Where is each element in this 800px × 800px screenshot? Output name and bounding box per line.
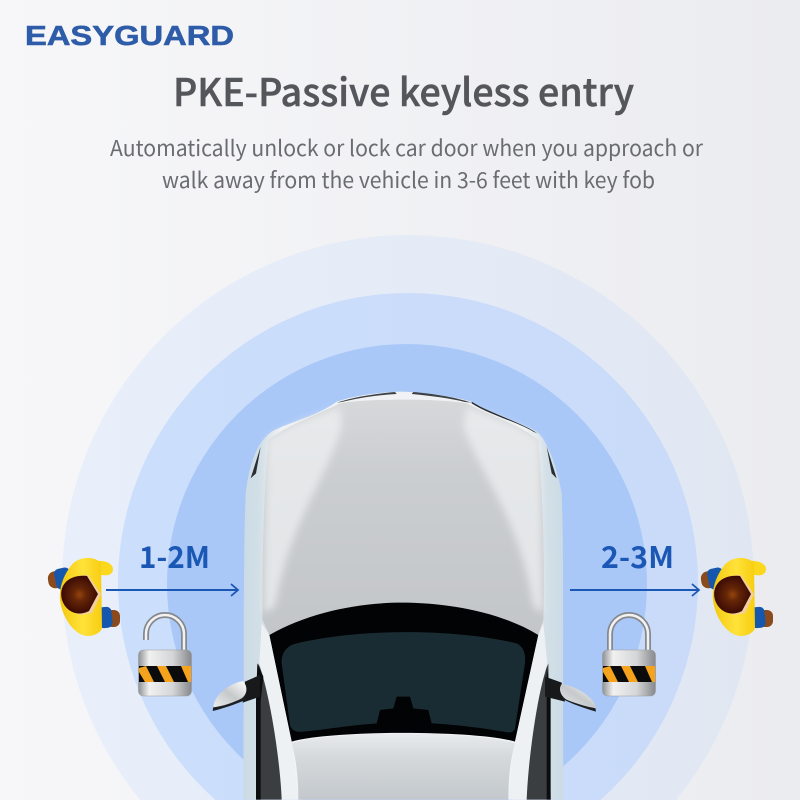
grille edge <box>337 392 472 403</box>
left distance label: 1-2M <box>139 533 210 577</box>
right mirror <box>545 677 596 712</box>
left arrow <box>106 584 238 596</box>
windshield glass <box>282 632 525 732</box>
hood <box>262 400 544 635</box>
right distance label: 2-3M <box>601 533 674 577</box>
left person icon <box>47 558 120 636</box>
side windows <box>257 663 282 800</box>
left padlock icon (open) <box>138 615 192 696</box>
car body <box>243 392 563 800</box>
A pillars <box>259 623 298 800</box>
description text <box>110 131 703 195</box>
brand logo: EASYGUARD <box>25 20 234 51</box>
title: PKE-Passive keyless entry <box>173 62 634 117</box>
left mirror <box>213 675 260 711</box>
hood highlights <box>263 407 543 613</box>
range circles <box>62 235 754 800</box>
car top view <box>213 392 596 800</box>
description text: Automatically unlock or lock car door when you approach or <box>110 131 703 163</box>
roof <box>292 734 515 800</box>
fender vents <box>251 447 261 478</box>
right padlock icon (closed) <box>602 615 656 696</box>
description text: walk away from the vehicle in 3-6 feet with key fob <box>162 163 655 195</box>
right arrow <box>570 584 699 596</box>
windshield frame <box>269 603 538 742</box>
right person icon <box>700 558 773 636</box>
